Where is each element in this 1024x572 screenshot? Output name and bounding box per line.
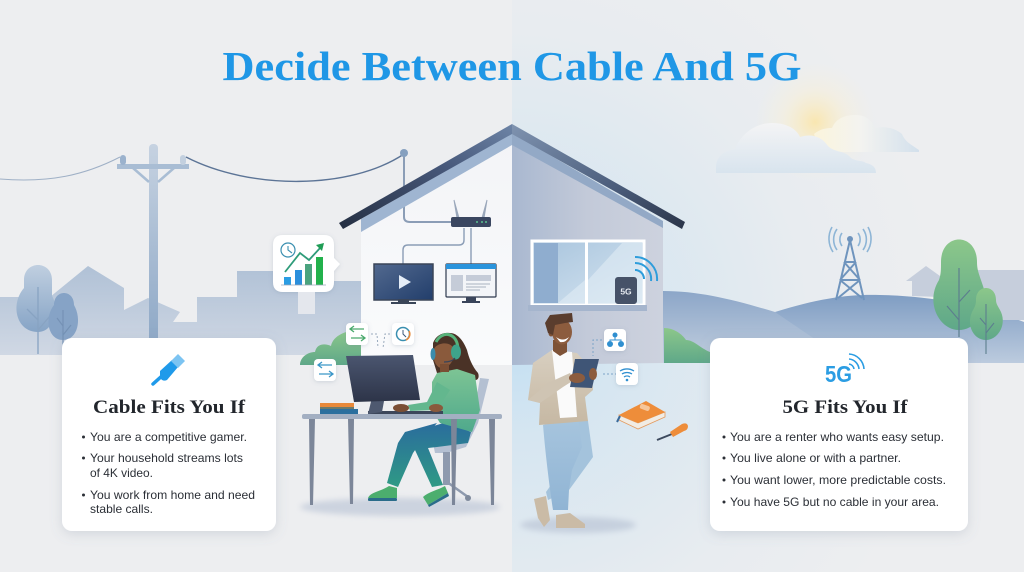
man with tablet (520, 313, 636, 533)
chip: blue arrows (314, 359, 336, 381)
bullet list: You are a competitive gamer. (90, 430, 247, 444)
desk shadow (300, 498, 500, 516)
neck and face (553, 340, 567, 356)
icon: TV (374, 264, 433, 304)
hills (663, 291, 1024, 363)
hair (545, 313, 573, 335)
front leg (543, 417, 582, 510)
mast head (400, 149, 408, 157)
sleeve (528, 373, 574, 403)
power lines (0, 154, 404, 181)
trees right (933, 240, 1003, 354)
right bush (664, 328, 710, 363)
cell tower (829, 227, 871, 300)
desk (302, 414, 502, 505)
icon chips left (314, 323, 414, 381)
headset (436, 334, 458, 350)
arm (408, 382, 450, 411)
sun glow (755, 62, 875, 182)
cardigan (528, 350, 593, 425)
bullet list (722, 430, 946, 509)
bullet list: stable calls. (90, 502, 153, 516)
5G home device: 5G (620, 286, 632, 296)
tablet (570, 359, 599, 388)
chair (433, 378, 489, 501)
bullet list (82, 430, 255, 516)
chip: network (604, 329, 626, 351)
icon: 5G signal (825, 354, 864, 387)
bullet list: Your household streams lots (90, 451, 243, 465)
icon: screwdriver (657, 423, 688, 440)
chip: green arrows (346, 323, 368, 345)
5G home device (615, 257, 657, 304)
back leg (546, 417, 593, 500)
utility pole (117, 144, 189, 354)
distant buildings (906, 266, 1024, 320)
cable drop and wiring (403, 154, 471, 264)
shoes (534, 496, 585, 528)
icon: book (617, 401, 665, 429)
torso (432, 369, 480, 432)
chip: clock (392, 323, 414, 345)
bullet list: You want lower, more predictable costs. (730, 473, 946, 487)
clouds (716, 115, 919, 173)
books (320, 403, 358, 414)
hair (433, 333, 479, 380)
panel: 5G (710, 338, 968, 531)
chip: wifi (616, 363, 638, 385)
hands (393, 404, 409, 412)
near leg (413, 422, 471, 487)
roof (339, 124, 685, 232)
window (528, 241, 647, 311)
computer monitor (346, 355, 420, 414)
bullet list: of 4K video. (90, 466, 153, 480)
icon: desktop monitor (446, 264, 496, 303)
keyboard (368, 411, 443, 414)
far leg (387, 423, 437, 487)
bullet list: You live alone or with a partner. (730, 451, 901, 465)
trees left (16, 265, 78, 354)
hands (569, 373, 585, 383)
icon: ethernet cable (153, 354, 185, 384)
dotted connectors (371, 334, 390, 348)
ground shadow (520, 517, 636, 533)
icon: 5G signal: 5G (825, 361, 852, 387)
shoes (368, 486, 449, 507)
woman at desk (300, 333, 502, 516)
house walls (361, 138, 663, 365)
bushes (300, 330, 361, 365)
chart callout (273, 235, 340, 314)
panel: cable (62, 338, 276, 531)
title: Decide Between Cable And 5G (222, 43, 802, 89)
bullet list: You have 5G but no cable in your area. (730, 495, 939, 509)
face (433, 343, 454, 368)
skyline left (0, 266, 361, 355)
router (451, 200, 491, 227)
heading: 5G Fits You If (782, 397, 908, 418)
bullet list: You are a renter who wants easy setup. (730, 430, 944, 444)
icon chips right (593, 329, 638, 385)
shirt (552, 350, 577, 418)
heading: Cable Fits You If (93, 397, 246, 418)
bullet list: You work from home and need (90, 488, 255, 502)
dotted connectors (593, 340, 616, 374)
